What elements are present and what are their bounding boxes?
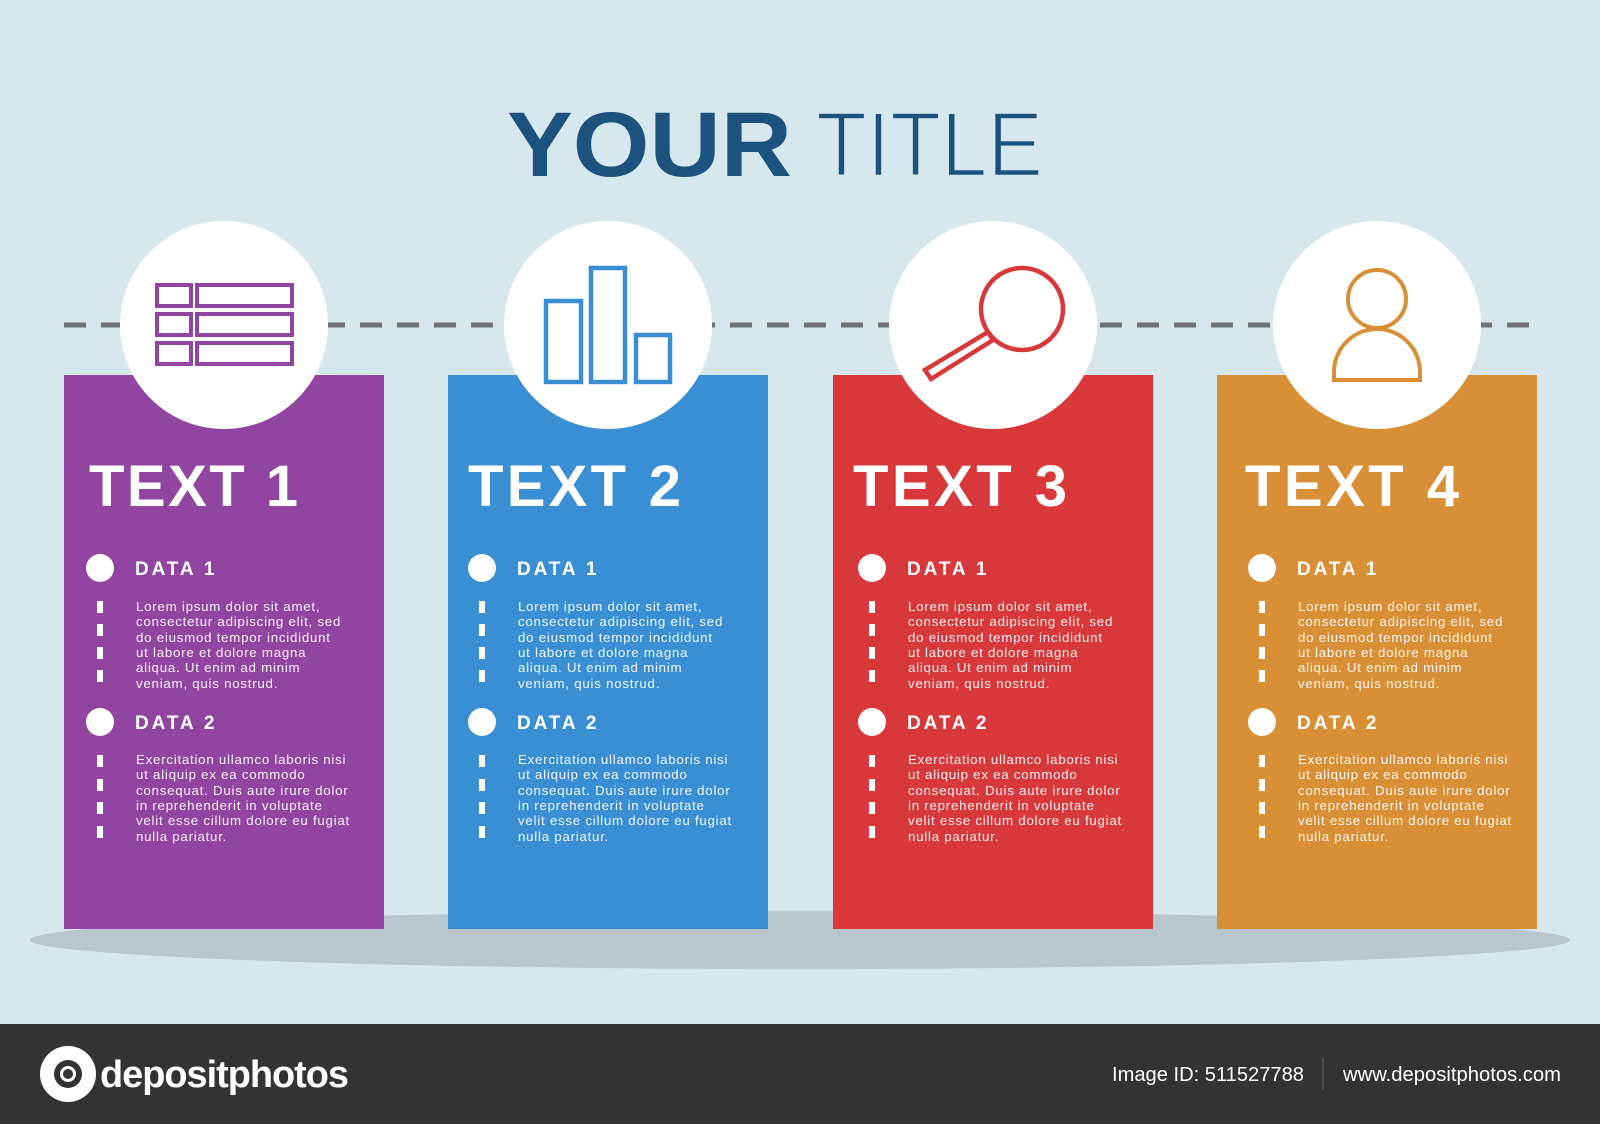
data 2: DATA 2 xyxy=(135,713,217,734)
data 1: ut labore et dolore magna xyxy=(1298,645,1468,660)
data 2: in reprehenderit in voluptate xyxy=(1298,798,1485,813)
data 2: DATA 2 xyxy=(517,713,599,734)
heading: TEXT 1 xyxy=(89,454,298,519)
data 2: ut aliquip ex ea commodo xyxy=(518,767,688,782)
data 2: consequat. Duis aute irure dolor xyxy=(1298,783,1510,798)
panel: text 2 xyxy=(448,221,768,929)
panel: text 3 xyxy=(833,221,1153,929)
data 2: ut aliquip ex ea commodo xyxy=(136,767,306,782)
data 1: consectetur adipiscing elit, sed xyxy=(518,614,723,629)
icon: camera logo xyxy=(40,1046,96,1102)
panel: text 1 xyxy=(64,221,384,929)
data 1 xyxy=(858,554,1113,691)
data 2 xyxy=(86,708,350,844)
icon circle: bar chart xyxy=(504,221,712,429)
data 2: velit esse cillum dolore eu fugiat xyxy=(136,813,350,828)
data 2: ut aliquip ex ea commodo xyxy=(1298,767,1468,782)
data 1 xyxy=(86,554,341,691)
data 2: nulla pariatur. xyxy=(136,829,227,844)
data 2: ut aliquip ex ea commodo xyxy=(908,767,1078,782)
data 2: nulla pariatur. xyxy=(1298,829,1389,844)
data 1: ut labore et dolore magna xyxy=(518,645,688,660)
data 2: nulla pariatur. xyxy=(908,829,999,844)
heading: TEXT 3 xyxy=(853,454,1067,519)
data 2 xyxy=(1248,708,1512,844)
image id: Image ID: 511527788 xyxy=(1112,1064,1304,1086)
data 1: aliqua. Ut enim ad minim xyxy=(1298,660,1462,675)
data 2: Exercitation ullamco laboris nisi xyxy=(518,752,728,767)
data 1 xyxy=(468,554,723,691)
title: TITLE xyxy=(816,94,1043,196)
data 2: velit esse cillum dolore eu fugiat xyxy=(518,813,732,828)
data 1: do eiusmod tempor incididunt xyxy=(1298,630,1493,645)
footer bar xyxy=(0,1024,1600,1124)
data 1: veniam, quis nostrud. xyxy=(136,676,278,691)
data 1: ut labore et dolore magna xyxy=(136,645,306,660)
data 2: consequat. Duis aute irure dolor xyxy=(518,783,730,798)
data 1: consectetur adipiscing elit, sed xyxy=(1298,614,1503,629)
dashed timeline xyxy=(64,322,1538,328)
title xyxy=(507,94,1043,196)
data 1: do eiusmod tempor incididunt xyxy=(136,630,331,645)
data 1: do eiusmod tempor incididunt xyxy=(518,630,713,645)
data 2: Exercitation ullamco laboris nisi xyxy=(1298,752,1508,767)
data 1: aliqua. Ut enim ad minim xyxy=(518,660,682,675)
data 2: in reprehenderit in voluptate xyxy=(136,798,323,813)
icon circle: person xyxy=(1273,221,1481,429)
data 2: DATA 2 xyxy=(1297,713,1379,734)
data 1: do eiusmod tempor incididunt xyxy=(908,630,1103,645)
data 1: veniam, quis nostrud. xyxy=(908,676,1050,691)
data 1: DATA 1 xyxy=(135,559,217,580)
heading: TEXT 2 xyxy=(468,454,681,519)
data 2: in reprehenderit in voluptate xyxy=(518,798,705,813)
data 1: Lorem ipsum dolor sit amet, xyxy=(518,599,702,614)
data 2: consequat. Duis aute irure dolor xyxy=(136,783,348,798)
data 1: aliqua. Ut enim ad minim xyxy=(908,660,1072,675)
data 2: Exercitation ullamco laboris nisi xyxy=(908,752,1118,767)
data 1: DATA 1 xyxy=(517,559,599,580)
shadow ellipse xyxy=(30,911,1570,969)
panel: text 4 xyxy=(1217,221,1537,929)
data 1: ut labore et dolore magna xyxy=(908,645,1078,660)
heading: TEXT 4 xyxy=(1245,454,1459,519)
data 1: consectetur adipiscing elit, sed xyxy=(136,614,341,629)
data 2 xyxy=(858,708,1122,844)
logo text: depositphotos xyxy=(100,1054,348,1096)
data 2 xyxy=(468,708,732,844)
icon circle: table xyxy=(120,221,328,429)
data 1: DATA 1 xyxy=(907,559,989,580)
data 1: Lorem ipsum dolor sit amet, xyxy=(136,599,320,614)
data 2: velit esse cillum dolore eu fugiat xyxy=(908,813,1122,828)
data 1: Lorem ipsum dolor sit amet, xyxy=(908,599,1092,614)
data 1: veniam, quis nostrud. xyxy=(518,676,660,691)
data 1: veniam, quis nostrud. xyxy=(1298,676,1440,691)
data 2: in reprehenderit in voluptate xyxy=(908,798,1095,813)
data 1: consectetur adipiscing elit, sed xyxy=(908,614,1113,629)
data 1 xyxy=(1248,554,1503,691)
data 1: aliqua. Ut enim ad minim xyxy=(136,660,300,675)
data 2: Exercitation ullamco laboris nisi xyxy=(136,752,346,767)
icon circle: magnifier xyxy=(889,221,1097,429)
data 2: DATA 2 xyxy=(907,713,989,734)
data 2: nulla pariatur. xyxy=(518,829,609,844)
title: YOUR xyxy=(507,94,792,196)
website: www.depositphotos.com xyxy=(1342,1064,1561,1086)
data 1: DATA 1 xyxy=(1297,559,1379,580)
data 2: consequat. Duis aute irure dolor xyxy=(908,783,1120,798)
data 1: Lorem ipsum dolor sit amet, xyxy=(1298,599,1482,614)
data 2: velit esse cillum dolore eu fugiat xyxy=(1298,813,1512,828)
